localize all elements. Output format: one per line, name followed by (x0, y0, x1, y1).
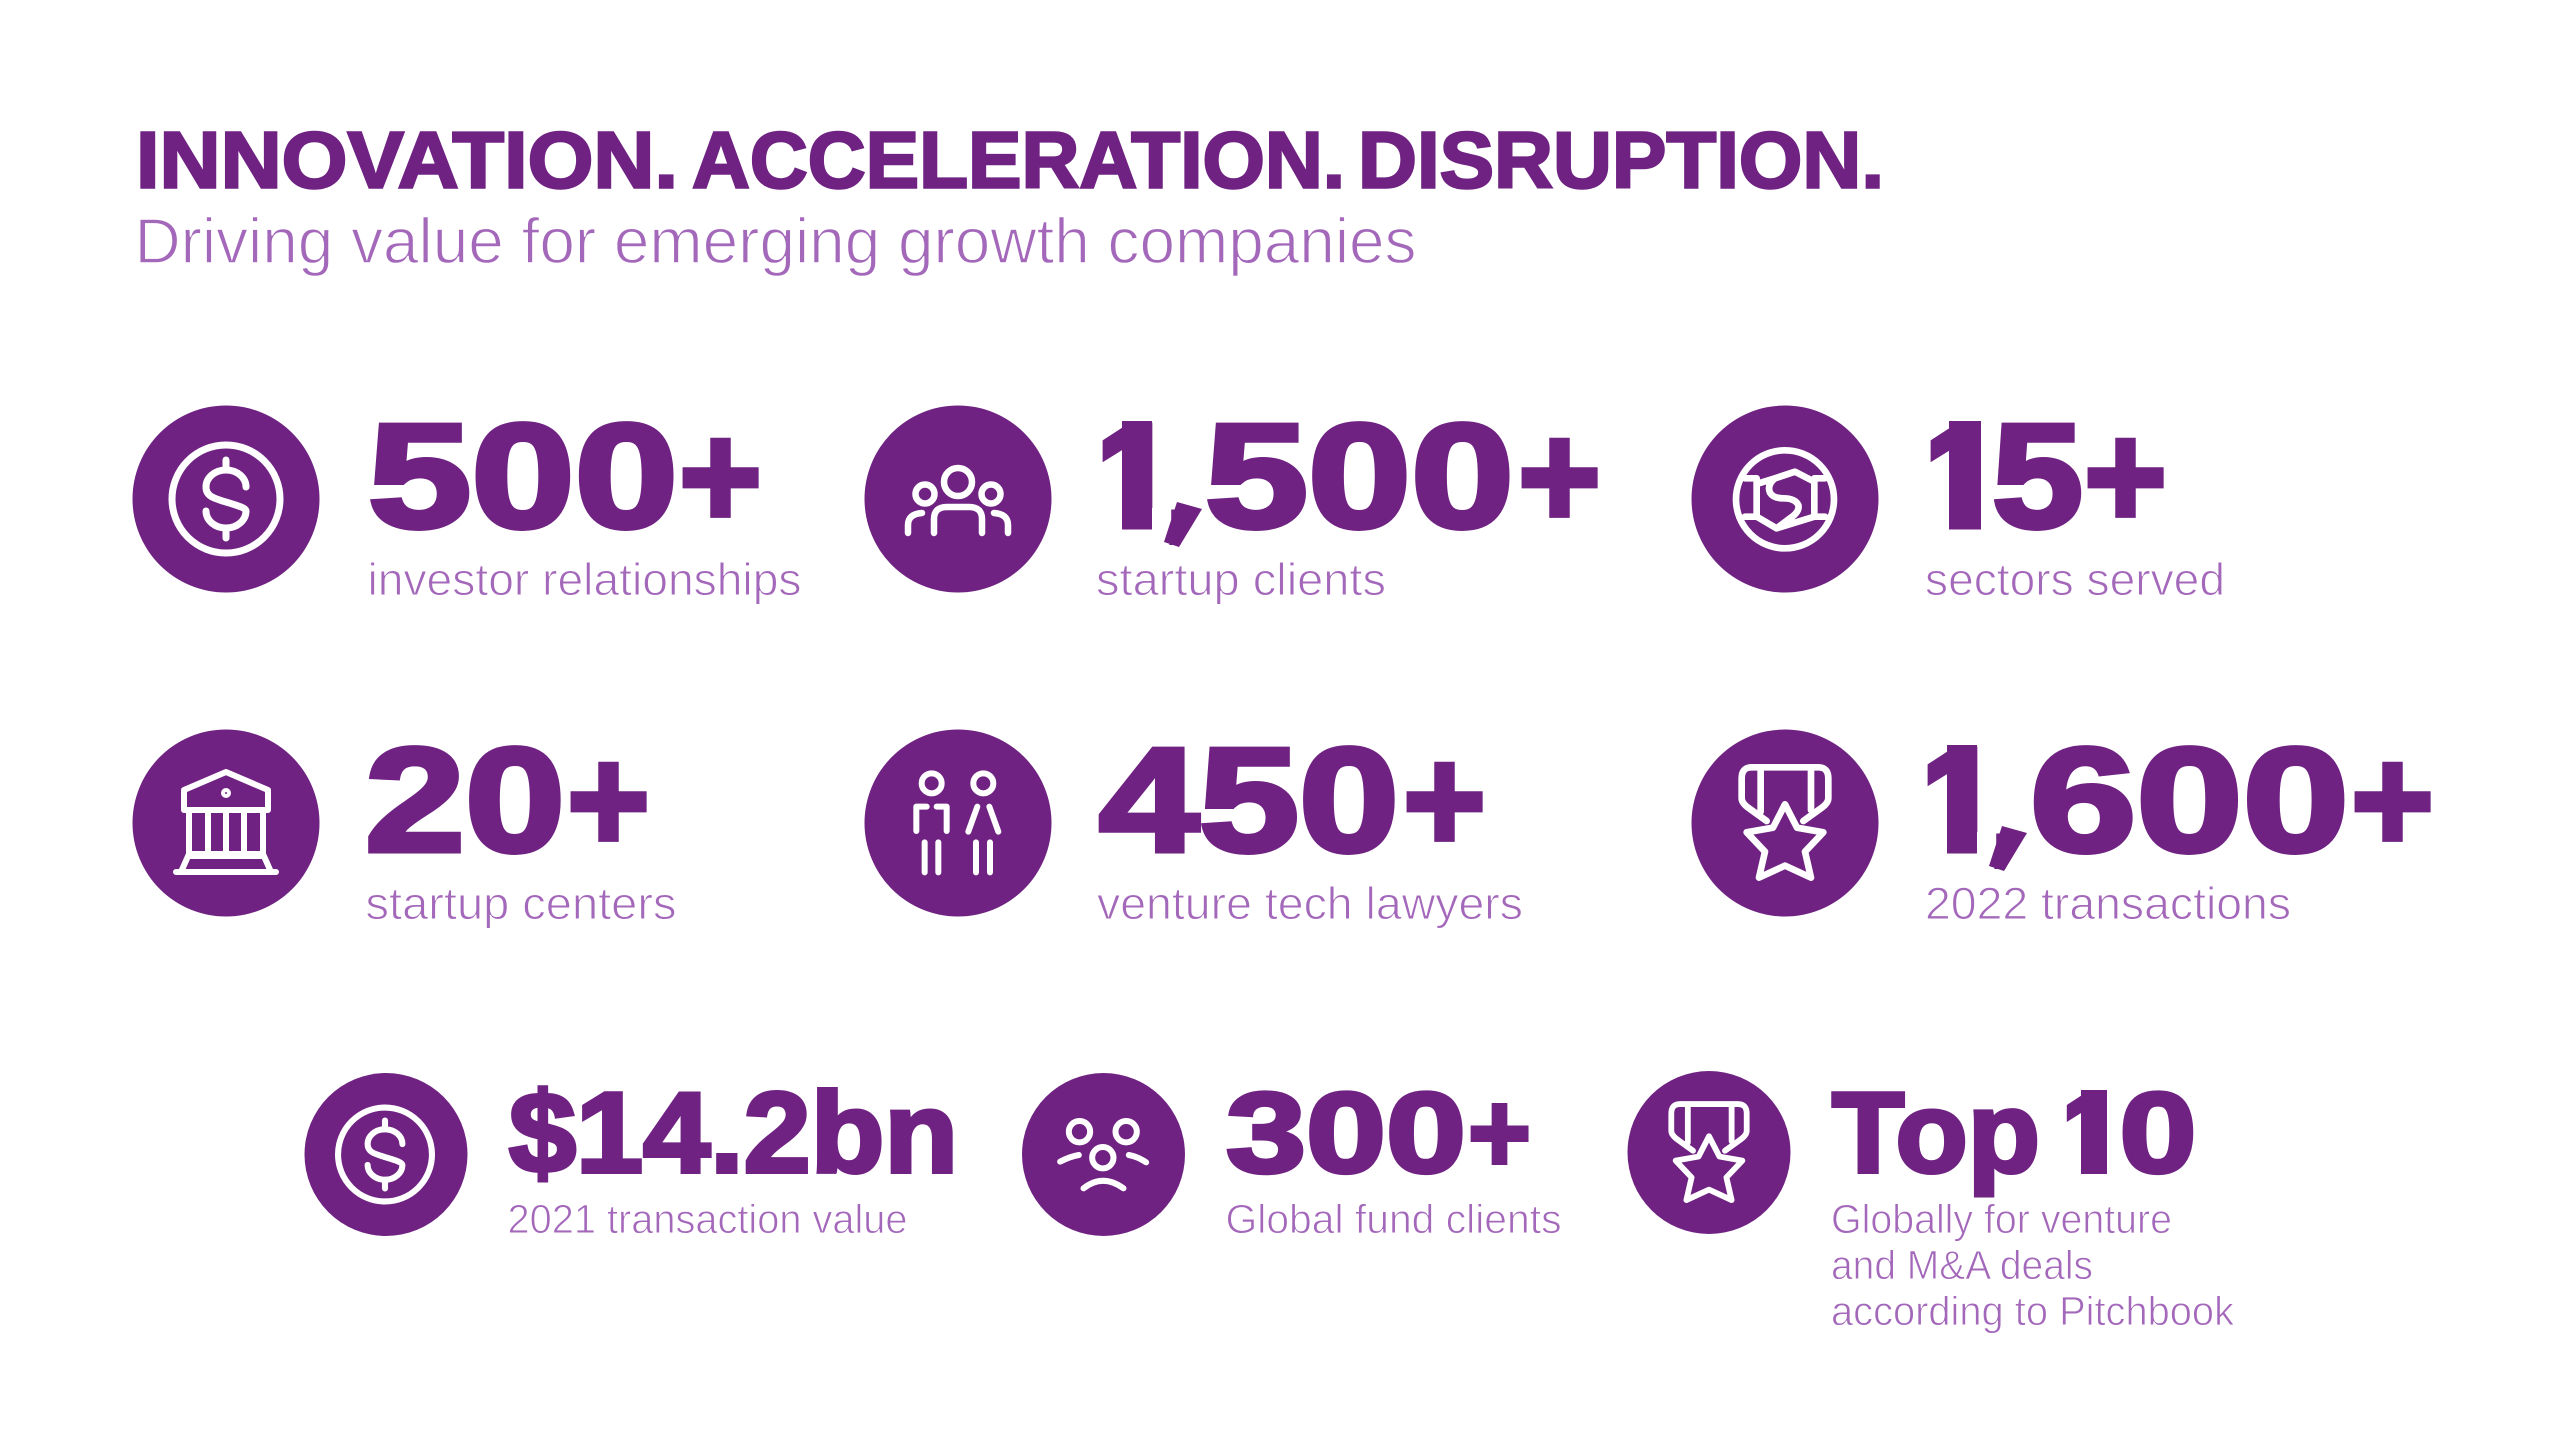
value: , (1993, 761, 2013, 873)
icon: medal (1692, 730, 1878, 916)
label: Global fund clients (1226, 1196, 1562, 1242)
value: + (567, 718, 650, 883)
value: 1 (1095, 394, 1177, 559)
label: startup centers (366, 878, 676, 929)
value: 450 (1099, 718, 1399, 883)
value: + (1403, 718, 1486, 883)
value: 5 (1992, 394, 2083, 559)
value: + (1468, 1070, 1531, 1197)
stat: 1,500+ startup clients (864, 394, 1601, 605)
value: 20 (365, 718, 565, 883)
label: startup clients (1096, 554, 1386, 605)
icon: group of people (864, 406, 1052, 592)
icon: dollar coin (304, 1073, 468, 1236)
value: 600 (2030, 718, 2349, 883)
value: + (2351, 718, 2434, 883)
value: 0 (2120, 1070, 2196, 1197)
label: venture tech lawyers (1097, 878, 1523, 929)
label: sectors served (1925, 554, 2225, 605)
value: , (1168, 437, 1188, 549)
title: DISRUPTION. (1358, 116, 1884, 204)
icon: bank building (132, 730, 320, 916)
value: 1 (1923, 394, 2005, 559)
value: 500 (368, 394, 678, 559)
value: 500 (1205, 394, 1514, 559)
value: 300 (1226, 1070, 1466, 1197)
stat: 450+ venture tech lawyers (864, 718, 1523, 929)
icon: dollar coin (132, 406, 320, 592)
label: 2022 transactions (1925, 878, 2291, 929)
value (1910, 718, 2434, 883)
icon: two people (864, 730, 1052, 916)
value: 1 (2061, 1070, 2124, 1197)
icon: medal (1628, 1071, 1790, 1234)
value: $14.2bn (509, 1070, 958, 1197)
label: 2021 transaction value (508, 1196, 908, 1242)
stat: 20+ startup centers (132, 718, 676, 929)
icon: global clients group (1022, 1073, 1185, 1236)
value: + (1518, 394, 1601, 559)
label: and M&A deals (1831, 1242, 2093, 1288)
label: Globally for venture (1831, 1196, 2172, 1242)
icon: handshake (1692, 406, 1878, 592)
value: + (2084, 394, 2167, 559)
value (1915, 394, 2167, 559)
label: according to Pitchbook (1831, 1288, 2234, 1334)
value (1832, 1070, 2196, 1197)
value: Top (1832, 1070, 2040, 1197)
title: INNOVATION. (136, 116, 678, 204)
title: ACCELERATION. (692, 116, 1345, 204)
value: + (679, 394, 762, 559)
stat: 15+ sectors served (1692, 394, 2225, 605)
value (1085, 394, 1601, 559)
value: 1 (1920, 718, 2002, 883)
label: investor relationships (368, 554, 802, 605)
stat: 1,600+ 2022 transactions (1692, 718, 2434, 929)
stat: $14.2bn 2021 transaction value (304, 1070, 958, 1242)
stat: Top 10 Globally for venture and M&A deals (1628, 1070, 2234, 1334)
subtitle: Driving value for emerging growth companies (134, 205, 1416, 277)
stat: 500+ investor relationships (132, 394, 802, 605)
stat: 300+ Global fund clients (1022, 1070, 1562, 1242)
